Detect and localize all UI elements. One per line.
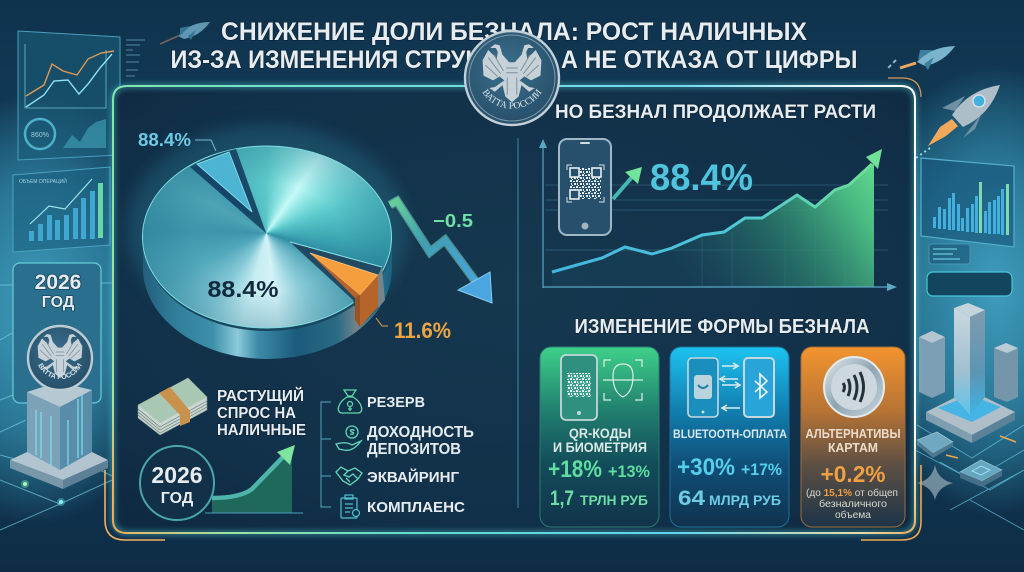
item: acquiring: ЭКВАЙРИНГ — [367, 468, 459, 486]
panel: QR and biometrics card: QR-КОДЫ — [569, 426, 631, 441]
icon: phone QR — [561, 355, 597, 420]
circuit lines left — [0, 283, 112, 530]
divider — [517, 138, 519, 508]
icon: medal small: ВАТТА РОССИИ — [38, 363, 82, 380]
pie chart — [127, 125, 407, 359]
item: acquiring — [336, 467, 459, 486]
panel: bluetooth card: +17% — [741, 460, 782, 479]
pie small blue slice — [193, 152, 252, 218]
title — [170, 18, 858, 74]
label: 11.6%: 11.6% — [394, 318, 451, 343]
right decorative side — [888, 46, 1024, 530]
text: growing demand: СПРОС НА — [217, 405, 296, 422]
value: 88.4%: 88.4% — [650, 157, 753, 198]
left decorative dashboards — [13, 22, 210, 252]
badge: 2026 year: ГОД — [161, 490, 194, 507]
2026 sidebar box — [13, 263, 101, 403]
arrow: decline — [390, 201, 492, 303]
text: growing demand — [217, 387, 306, 439]
chart: 2026 mini growth — [205, 445, 303, 513]
glowing dots — [21, 480, 65, 506]
item: deposit yield: ДОХОДНОСТЬ — [367, 424, 474, 441]
list bracket — [321, 402, 331, 507]
2026 sidebar box: ГОД — [42, 294, 75, 311]
panel: card alternatives card: +0.2% — [820, 461, 886, 487]
item: reserve: РЕЗЕРВ — [367, 395, 425, 411]
item: deposit yield: ДЕПОЗИТОВ — [367, 441, 461, 458]
panel: bluetooth card — [670, 347, 789, 527]
panel: right bar dashboard — [921, 158, 1014, 247]
icon: medal small — [26, 324, 94, 389]
2026 sidebar box: 2026 — [35, 271, 81, 294]
icon: phone left — [688, 358, 718, 417]
panel: card alternatives card: объема — [835, 509, 871, 521]
item: compliance — [341, 495, 465, 518]
panel: card alternatives card: КАРТАМ — [828, 440, 878, 455]
panel: card alternatives card: АЛЬТЕРНАТИВЫ — [806, 426, 900, 441]
panel: card alternatives card — [801, 347, 905, 527]
icon: big rocket — [916, 85, 1000, 158]
icon: cash stack — [138, 378, 207, 435]
pie main slice — [142, 146, 392, 328]
title: ИЗ-ЗА ИЗМЕНЕНИЯ СТРУКТУРЫ, А НЕ ОТКАЗА ОТ ЦИФРЫ — [170, 46, 858, 74]
panel: QR and biometrics card: +13% — [608, 462, 650, 481]
icon: coin in hand — [336, 426, 361, 450]
label: 88.4% pointer: 88.4% — [138, 130, 191, 150]
badge: 2026 year: 2026 — [151, 462, 203, 488]
chart: cashless growth — [539, 139, 897, 291]
heading: cashless keeps growing: НО БЕЗНАЛ ПРОДОЛЖАЕТ РАСТИ — [555, 101, 876, 123]
label: 88.4% pointer — [138, 130, 216, 151]
panel: card alternatives card: безналичного — [819, 498, 887, 510]
pie center label: 88.4% — [208, 276, 278, 302]
text: growing demand: РАСТУЩИЙ — [217, 387, 304, 405]
chip right — [960, 460, 1002, 487]
badge: 2026 year — [140, 446, 214, 520]
panel: QR and biometrics card: И БИОМЕТРИЯ — [553, 440, 647, 455]
item: reserve — [338, 390, 425, 413]
pie orange slice — [290, 242, 385, 327]
panel: line chart dashboard — [18, 31, 145, 160]
panel: bar chart dashboard — [13, 167, 110, 252]
pie gap — [190, 149, 266, 233]
towers and platform — [919, 303, 1018, 443]
pie rim — [146, 256, 388, 326]
icon: handshake — [336, 467, 362, 485]
pie side — [143, 240, 392, 359]
icon: phone with QR — [559, 139, 611, 235]
text: growing demand: НАЛИЧНЫЕ — [217, 422, 306, 439]
icon: star — [917, 465, 953, 500]
panel: QR and biometrics card: ТРЛН РУБ — [580, 492, 648, 508]
title: СНИЖЕНИЕ ДОЛИ БЕЗНАЛА: РОСТ НАЛИЧНЫХ — [221, 18, 807, 46]
item: deposit yield — [336, 424, 474, 458]
bank pedestal with medal — [10, 324, 108, 489]
icon: contactless — [824, 357, 884, 417]
icon: clipboard — [341, 495, 360, 518]
panel: bluetooth card: +30% — [677, 454, 735, 481]
item: compliance: КОМПЛАЕНС — [367, 499, 465, 516]
arrow: phone up — [613, 167, 642, 199]
panel: card alternatives card: (до 15,1% от общеп — [806, 487, 898, 499]
panel: bluetooth card: BLUETOOTH-ОПЛАТА — [673, 427, 787, 441]
label: minus 0.5: −0.5 — [433, 211, 473, 231]
circuit lines right — [915, 425, 1024, 530]
icon: phone bluetooth — [744, 358, 774, 417]
heading: form change: ИЗМЕНЕНИЕ ФОРМЫ БЕЗНАЛА — [574, 316, 870, 338]
chip left — [917, 432, 953, 458]
sparks — [946, 436, 1016, 458]
panel: QR and biometrics card: +18% — [548, 456, 602, 483]
panel: line chart dashboard: 860% — [31, 132, 49, 139]
icon: small rocket left — [160, 22, 210, 44]
panel: QR and biometrics card: 1,7 — [550, 487, 574, 510]
icon: money bag — [338, 390, 362, 413]
panel: bar chart dashboard: ОБЪЕМ ОПЕРАЦИЙ — [19, 177, 67, 185]
pie outline — [142, 146, 392, 328]
panel: small status card — [929, 244, 970, 264]
icon: face scan — [603, 360, 643, 400]
panel: main frame — [105, 78, 921, 540]
icon: central bank medal: ВАТТА РОССИИ — [482, 88, 542, 109]
icon: small rocket right — [888, 46, 955, 70]
panel: bluetooth card: 64 — [678, 487, 705, 510]
icon: transfer arrows — [720, 363, 740, 411]
panel: empty button — [927, 272, 1012, 296]
icon: central bank medal — [464, 30, 560, 126]
panel: QR and biometrics card — [540, 347, 659, 527]
panel: bluetooth card: МЛРД РУБ — [709, 492, 781, 508]
